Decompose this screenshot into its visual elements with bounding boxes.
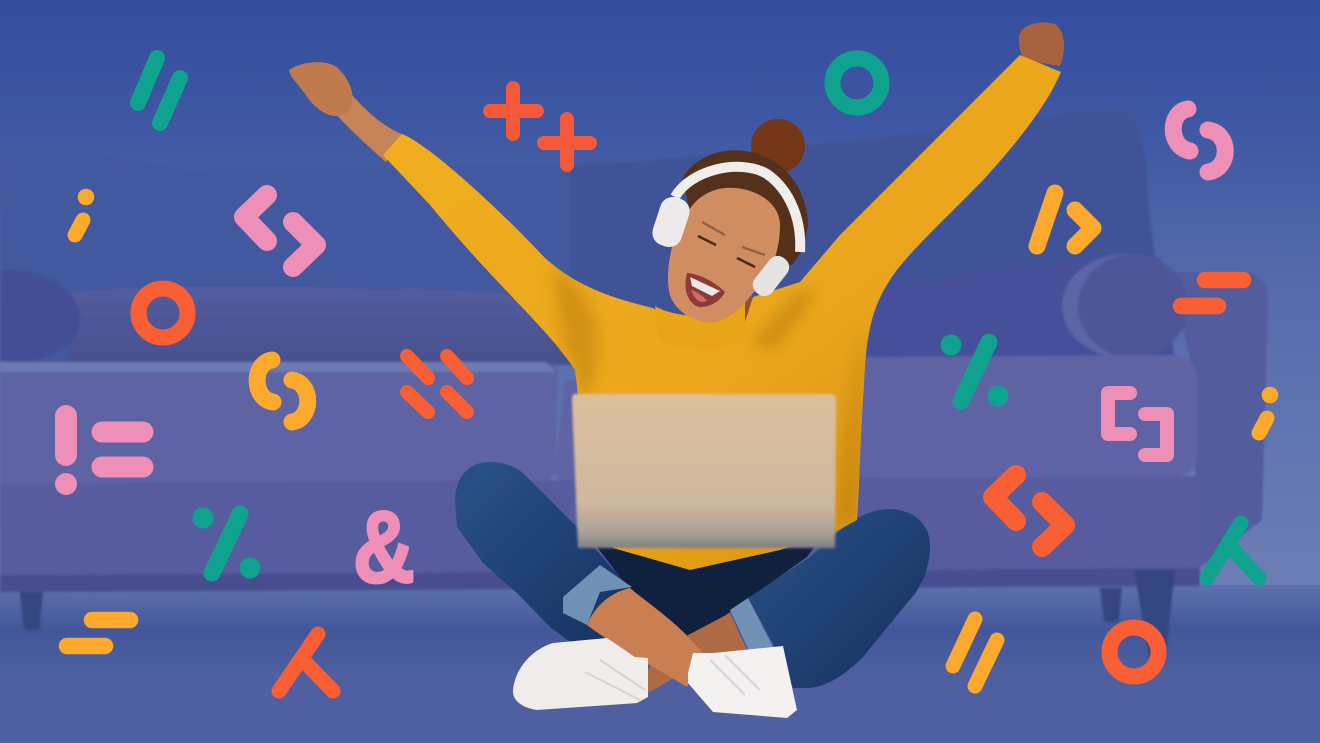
floor [0,585,1320,743]
glyph: pink angle brackets [244,195,316,267]
sweater shading [555,262,868,530]
sofa left bolster [0,270,80,368]
headphones [649,167,800,300]
face [668,188,780,323]
glyph: yellow i right [1259,387,1278,433]
hair [683,150,808,265]
glyph: yellow i [75,189,94,235]
hand right [1019,22,1064,66]
sofa lower back cushions [70,286,570,365]
glyph: pink S [1173,109,1225,172]
glyph: teal caret [1207,523,1259,578]
jeans cuffs [563,565,773,653]
glyph: ampersand: & [353,490,415,604]
jeans leg left [455,462,640,647]
glyph: teal percent left [192,508,260,578]
glyph: pink not-equal [55,416,143,495]
glyph: teal slashes [138,58,180,123]
sofa legs [20,570,1175,660]
glyph: yellow dashes [67,620,130,646]
shin front [587,588,702,687]
hand left [289,62,353,116]
glyph: yellow S [257,360,308,422]
glyph: plus signs [490,88,590,165]
glyph: teal ring [832,58,882,108]
woman [289,22,1064,718]
sofa right arm [1170,272,1268,568]
sneakers [513,638,797,718]
mouth [685,273,725,307]
neck [690,285,752,335]
jeans leg right [748,509,930,688]
shin back [647,613,748,693]
jeans [455,462,930,688]
glyph: teal percent right [940,334,1008,406]
glyph: red ring [1110,628,1158,676]
glyph: pink square brackets [1108,393,1167,455]
jeans seat [580,525,830,642]
forearm left [336,95,402,162]
glyph: orange caret [279,634,333,691]
glyph: red angle brackets [993,475,1065,547]
glyph: orange ring [138,288,188,338]
laptop [572,394,836,548]
glyph: red double slashes [407,356,467,412]
glyph: red dashes [1181,280,1243,306]
sweater collar [655,300,745,349]
sofa back cushions [0,146,570,365]
hair bun [751,119,805,173]
glyph: yellow slash bracket [1037,193,1093,246]
sofa [0,108,1268,660]
sofa base [0,476,1200,575]
glyph: yellow slashes [953,619,997,686]
sweater [383,55,1061,570]
eyes and brows [698,236,755,267]
sofa right bolster [1062,254,1188,358]
sofa seat cushions [0,362,559,484]
